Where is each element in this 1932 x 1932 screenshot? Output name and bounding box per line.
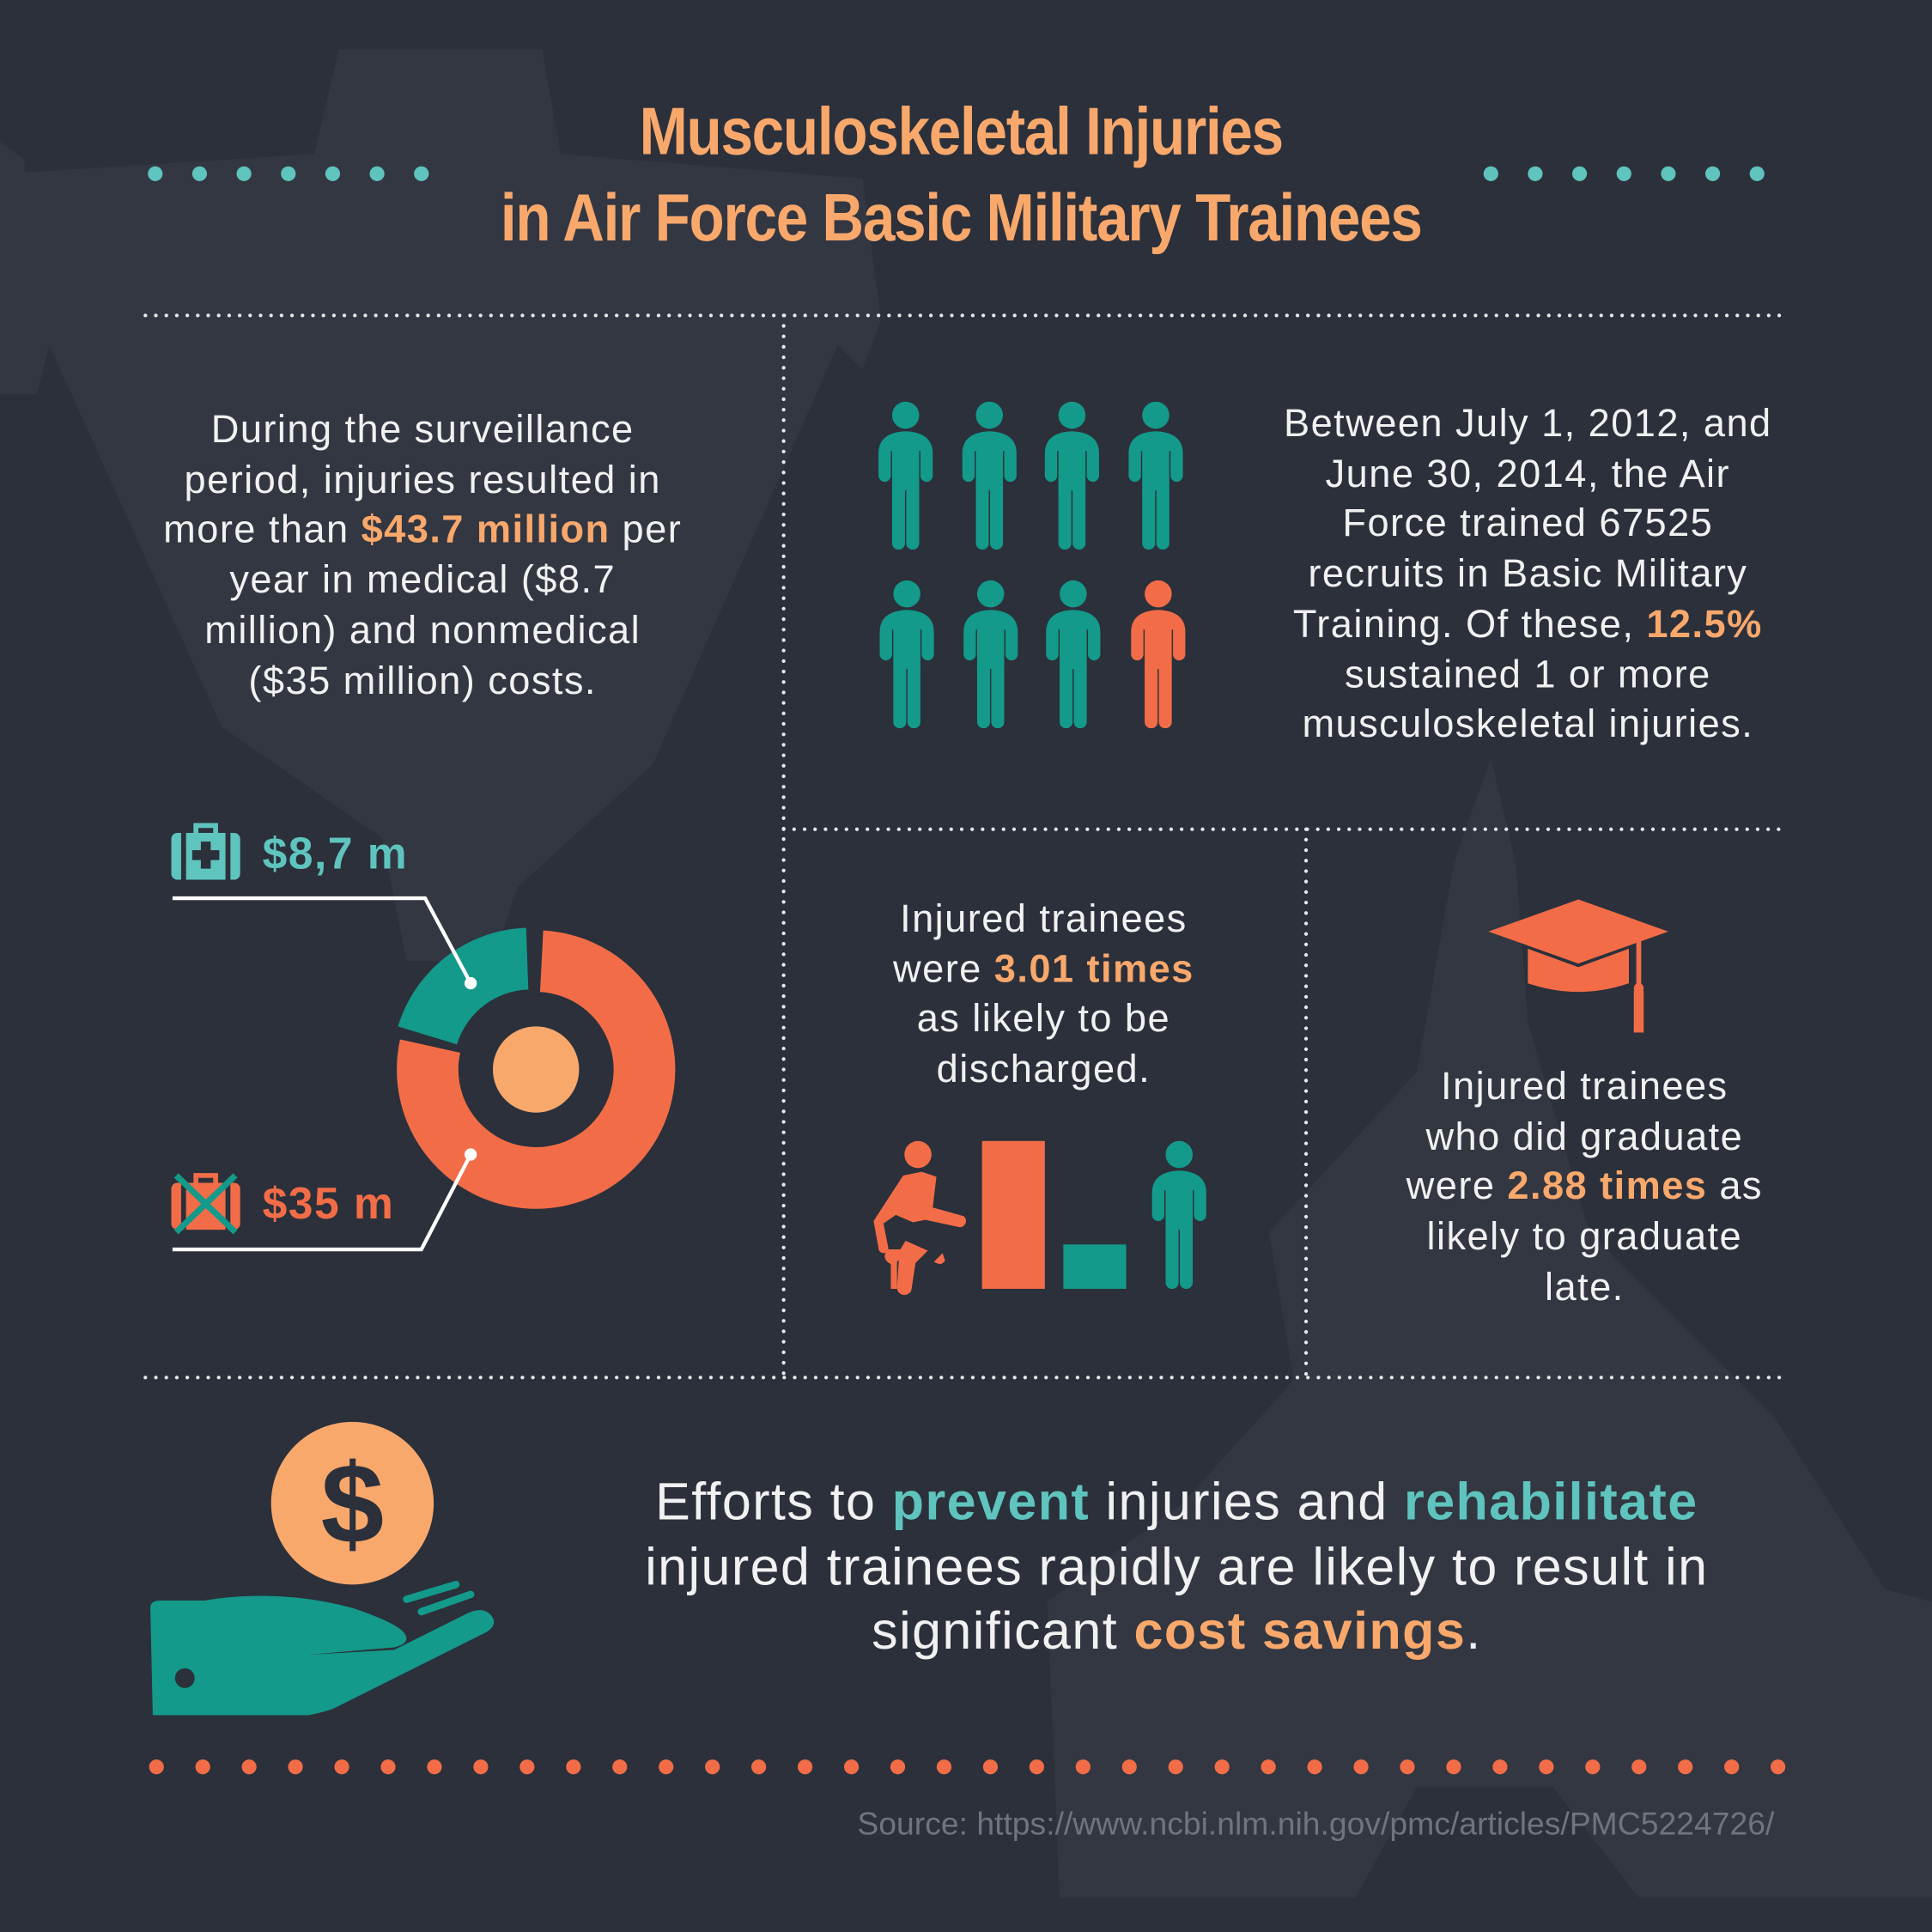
text: cost summary: period, injuries resulted in xyxy=(185,457,661,501)
text: cost summary: During the surveillance xyxy=(211,407,635,451)
title: Musculoskeletal Injuries xyxy=(640,94,1283,169)
text: recruits: musculoskeletal injuries. xyxy=(1302,702,1753,745)
icon: graduation cap xyxy=(1489,900,1668,1032)
text: recruits: sustained 1 or more xyxy=(1345,651,1711,696)
text: discharged: were 3.01 times xyxy=(893,946,1194,990)
title xyxy=(501,94,1422,255)
dots left teal xyxy=(148,167,429,181)
source: Source: https://www.ncbi.nlm.nih.gov/pmc/articles/PMC5224726/ xyxy=(857,1805,1774,1842)
icon: crossed briefcase xyxy=(172,1173,240,1235)
text: cost summary: million) and nonmedical xyxy=(204,607,641,652)
text: late graduation: were 2.88 times as xyxy=(1406,1163,1763,1208)
text: conclusion: significant cost savings. xyxy=(872,1603,1482,1661)
title: in Air Force Basic Military Trainees xyxy=(501,181,1422,255)
icon: medical briefcase xyxy=(172,823,240,879)
icon: hand with coin xyxy=(150,1422,495,1716)
text: conclusion: Efforts to prevent injuries and rehabilitate xyxy=(655,1473,1698,1532)
text: discharged: discharged. xyxy=(937,1046,1151,1091)
text: recruits: recruits in Basic Military xyxy=(1308,551,1747,595)
donut chart xyxy=(172,896,675,1252)
text: recruits: Training. Of these, 12.5% xyxy=(1293,601,1763,646)
text: cost summary: ($35 million) costs. xyxy=(248,658,597,702)
text: late graduation: late. xyxy=(1545,1264,1625,1309)
people grid xyxy=(878,402,1185,728)
text: late graduation: likely to graduate xyxy=(1427,1214,1742,1258)
text: late graduation: Injured trainees xyxy=(1441,1063,1728,1108)
text: conclusion: injured trainees rapidly are likely to result in xyxy=(645,1539,1709,1596)
text: discharged: Injured trainees xyxy=(900,896,1188,940)
text: discharged xyxy=(893,896,1194,1091)
text: cost summary: more than $43.7 million per xyxy=(163,507,682,551)
dots bottom coral xyxy=(149,1759,1786,1774)
text: recruits: Force trained 67525 xyxy=(1342,501,1713,545)
text: late graduation xyxy=(1406,1063,1763,1309)
chart: discharge comparison xyxy=(873,1140,1206,1295)
icon: hand with coin: $ xyxy=(321,1440,384,1567)
text: discharged: as likely to be xyxy=(917,996,1170,1041)
text: recruits: Between July 1, 2012, and xyxy=(1284,400,1772,445)
text: cost summary xyxy=(163,407,682,702)
text: late graduation: who did graduate xyxy=(1425,1114,1743,1157)
label: $35 m: $35 m xyxy=(263,1178,394,1229)
dots right teal xyxy=(1484,167,1765,181)
text: recruits: June 30, 2014, the Air xyxy=(1326,451,1730,495)
text: cost summary: year in medical ($8.7 xyxy=(229,557,616,601)
text: conclusion xyxy=(645,1473,1709,1661)
label: $8,7 m: $8,7 m xyxy=(263,828,408,878)
text: recruits xyxy=(1284,400,1772,745)
